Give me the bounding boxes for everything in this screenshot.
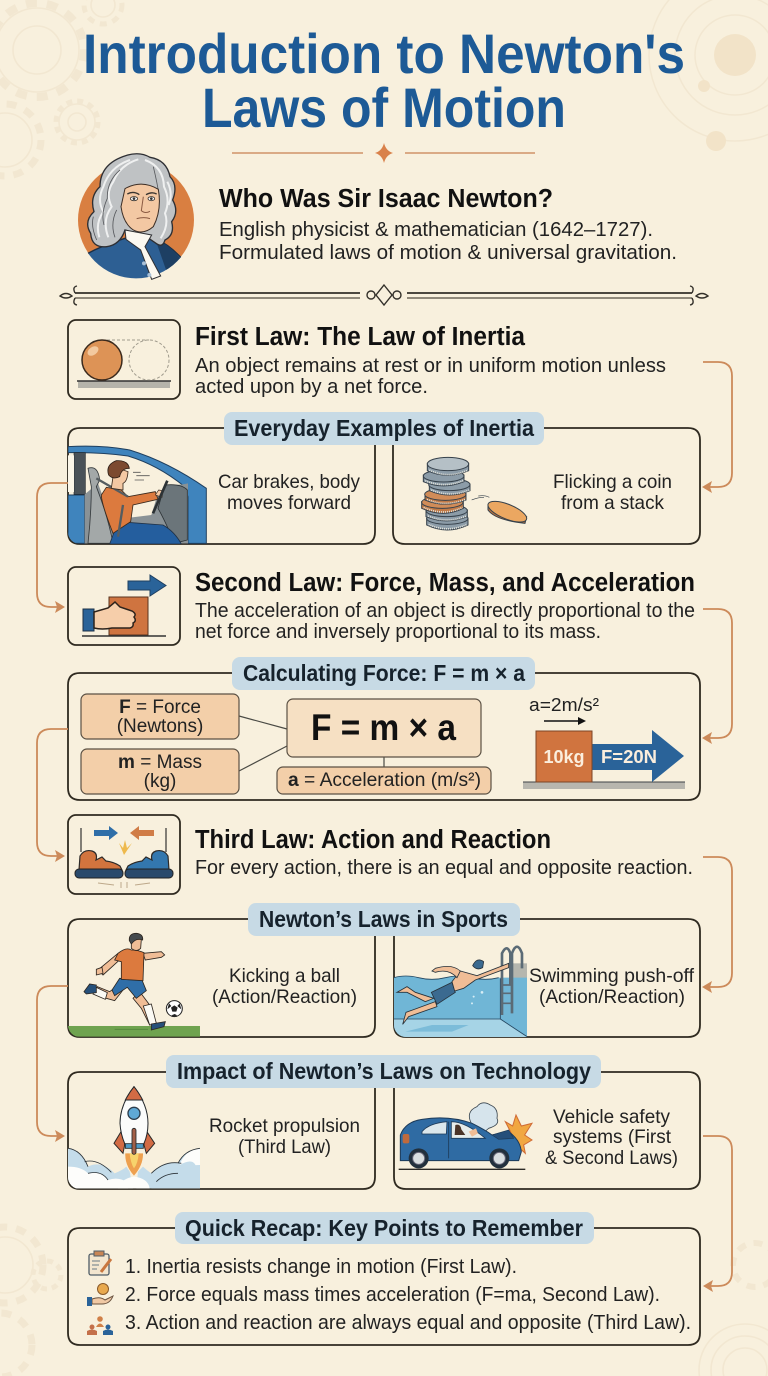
text: vehicle safety systems: Vehicle safety xyxy=(553,1106,670,1128)
panel: Newton's laws in sports xyxy=(68,903,700,1039)
icon: hand pushing box xyxy=(68,567,180,645)
illustration: driver braking in a car xyxy=(68,446,206,544)
arrow: sports to technology xyxy=(37,986,68,1142)
arrow: technology to recap xyxy=(703,1136,732,1292)
box: F = Force: (Newtons) xyxy=(117,716,203,737)
text: vehicle safety systems xyxy=(545,1106,678,1169)
icon: people xyxy=(87,1316,113,1335)
heading pill: technology: Impact of Newton’s Laws on Technology xyxy=(177,1058,591,1084)
text: vehicle safety systems: systems (First xyxy=(553,1126,672,1148)
text: second law definition xyxy=(195,599,695,643)
heading: second law: Second Law: Force, Mass, and Acceleration xyxy=(195,569,695,597)
heading pill: quick recap: Quick Recap: Key Points to Remember xyxy=(185,1215,583,1241)
intro: who was Newton: Formulated laws of motion & universal gravitation. xyxy=(219,241,677,264)
panel: first law xyxy=(68,320,666,399)
diagram: 10kg block with 20N force: a=2m/s² xyxy=(529,694,599,715)
text: swimming push-off: Swimming push-off xyxy=(529,965,695,987)
intro: who was Newton: English physicist & mathematician (1642–1727). xyxy=(219,218,653,241)
formula box xyxy=(287,699,481,757)
text: vehicle safety systems: & Second Laws) xyxy=(545,1147,678,1169)
text: first law definition xyxy=(195,354,666,398)
text: kicking a ball xyxy=(212,965,357,1008)
panel: third law xyxy=(68,815,693,894)
text: kicking a ball: Kicking a ball xyxy=(229,965,340,987)
arrow: first law to examples xyxy=(702,362,732,493)
illustration: swimmer pushing off wall xyxy=(394,947,527,1039)
text: first law definition: acted upon by a net force. xyxy=(195,375,428,398)
text: point 3: 3. Action and reaction are always equal and opposite (Third Law). xyxy=(125,1311,691,1334)
text: kicking a ball: (Action/Reaction) xyxy=(212,986,357,1008)
arrow: second law to calculation xyxy=(702,609,732,744)
text: car brakes: Car brakes, body xyxy=(218,471,360,493)
diagram: 10kg block with 20N force: 10kg xyxy=(543,747,585,767)
heading: third law: Third Law: Action and Reaction xyxy=(195,826,551,854)
diagram: 10kg block with 20N force: F=20N xyxy=(601,747,657,767)
formula box: F = m × a xyxy=(311,707,456,748)
box: m = Mass: m = Mass xyxy=(118,752,202,773)
panel: second law xyxy=(68,567,695,645)
title: Laws of Motion xyxy=(202,76,566,139)
box: m = Mass xyxy=(81,749,239,794)
text: rocket propulsion: (Third Law) xyxy=(238,1136,331,1158)
title: Introduction to Newton's xyxy=(83,22,685,85)
text: swimming push-off xyxy=(529,965,695,1008)
heading: first law: First Law: The Law of Inertia xyxy=(195,323,526,351)
box: F = Force xyxy=(81,694,239,739)
text: first law definition: An object remains at rest or in uniform motion unless xyxy=(195,354,666,377)
title divider xyxy=(232,143,535,163)
heading pill: everyday examples: Everyday Examples of Inertia xyxy=(234,415,535,441)
portrait: Sir Isaac Newton xyxy=(78,154,194,283)
heading pill: calculating force: Calculating Force: F = m × a xyxy=(243,660,526,686)
text: point 2: 2. Force equals mass times acceleration (F=ma, Second Law). xyxy=(125,1283,660,1306)
text: flicking a coin: from a stack xyxy=(561,492,664,514)
text: point 1: 1. Inertia resists change in motion (First Law). xyxy=(125,1255,517,1278)
text: second law definition: net force and inversely proportional to its mass. xyxy=(195,620,601,643)
panel: quick recap xyxy=(68,1212,700,1345)
text: flicking a coin xyxy=(553,471,672,514)
illustration: footballer kicking a ball xyxy=(68,933,200,1037)
heading pill: sports: Newton’s Laws in Sports xyxy=(259,906,508,932)
panel: everyday examples of inertia xyxy=(68,412,700,544)
box: a = Acceleration xyxy=(277,767,491,794)
intro: who was Newton: Who Was Sir Isaac Newton? xyxy=(219,185,553,213)
icon: clipboard xyxy=(89,1251,111,1275)
text: rocket propulsion: Rocket propulsion xyxy=(209,1115,360,1137)
text: flicking a coin: Flicking a coin xyxy=(553,471,672,493)
box: F = Force: F = Force xyxy=(119,697,201,718)
icon: bumper cars colliding xyxy=(68,815,180,894)
intro: who was Newton xyxy=(219,185,677,264)
icon: ball at rest xyxy=(68,320,180,399)
text: swimming push-off: (Action/Reaction) xyxy=(539,986,685,1008)
text: rocket propulsion xyxy=(209,1115,360,1158)
text: third law definition: For every action, there is an equal and opposite reaction. xyxy=(195,856,693,879)
box: a = Acceleration: a = Acceleration (m/s²) xyxy=(288,770,481,791)
arrow: calculation to third law xyxy=(37,729,68,862)
arrow: examples to second law xyxy=(37,483,68,613)
arrow: third law to sports xyxy=(702,857,732,993)
panel: calculating force xyxy=(68,657,700,800)
text: car brakes: moves forward xyxy=(227,492,351,514)
illustration: flicking a coin from a stack xyxy=(422,457,529,530)
text: car brakes xyxy=(218,471,360,514)
panel: impact on technology xyxy=(68,1055,700,1189)
illustration: car crash with airbag xyxy=(399,1103,532,1169)
illustration: rocket launch xyxy=(68,1087,200,1188)
text: second law definition: The acceleration of an object is directly proportional to the xyxy=(195,599,695,622)
diagram: 10kg block with 20N force xyxy=(523,694,685,789)
title xyxy=(83,22,685,139)
box: m = Mass: (kg) xyxy=(144,771,176,792)
icon: hand with coin xyxy=(87,1284,113,1306)
